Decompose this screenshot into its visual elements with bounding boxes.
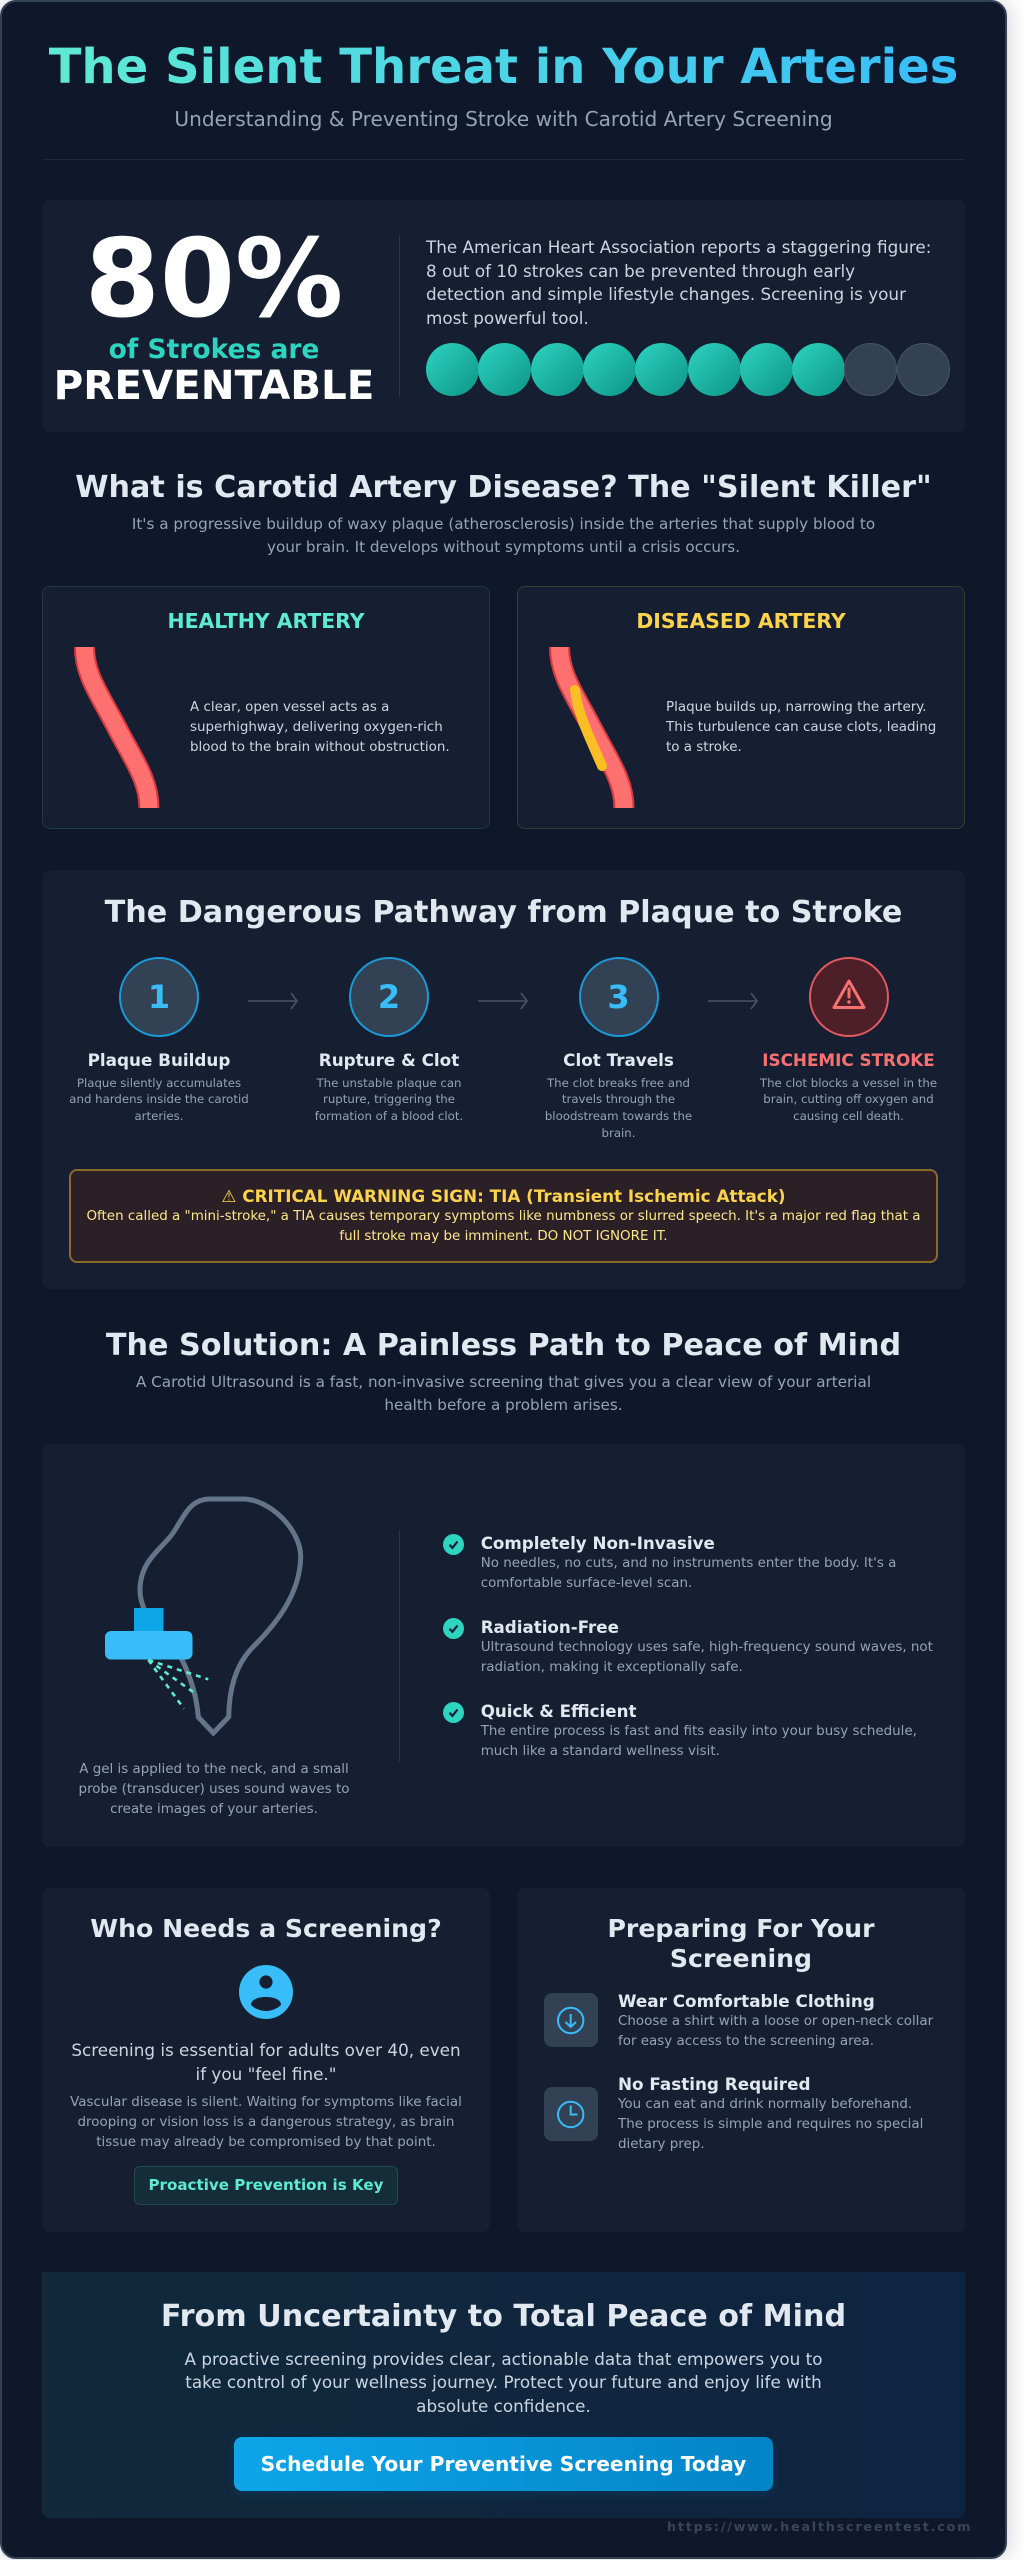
panel: diseased artery	[517, 586, 965, 829]
panel: pathway from plaque to stroke	[42, 870, 965, 1289]
benefit 3 title: Quick & Efficient	[481, 1701, 636, 1721]
warning text: Often called a "mini-stroke," a TIA causes temporary symptoms like numbness or slurred speech. It's a major red flag that a	[86, 1209, 921, 1224]
panel: ultrasound solution	[42, 1444, 965, 1847]
8 of 10 dots	[426, 343, 950, 396]
section intro	[132, 515, 875, 556]
illustration caption: A gel is applied to the neck, and a small	[79, 1762, 349, 1776]
diseased description: Plaque builds up, narrowing the artery.	[666, 700, 927, 715]
icon: check 3	[443, 1702, 464, 1723]
arrow	[248, 992, 298, 1010]
step 1 text: and hardens inside the carotid	[69, 1092, 249, 1106]
step 2 text: The unstable plaque can	[316, 1076, 462, 1090]
statistic explanation	[426, 237, 931, 328]
clothing text: Choose a shirt with a loose or open-neck collar	[618, 2014, 933, 2029]
step 2 number: 2	[378, 978, 400, 1016]
step 2 title: Rupture & Clot	[319, 1050, 459, 1070]
statistic explanation: detection and simple lifestyle changes. Screening is your	[426, 284, 906, 304]
benefit 3 text: much like a standard wellness visit.	[481, 1744, 720, 1759]
who lead text	[71, 2040, 461, 2084]
step 2 number	[349, 957, 429, 1037]
warning text	[86, 1209, 921, 1244]
preparing heading: Preparing For Your	[607, 1914, 875, 1943]
panel: call to action	[42, 2272, 965, 2518]
arrow	[478, 992, 528, 1010]
benefit 1 text: comfortable surface-level scan.	[481, 1576, 692, 1591]
stat label: of Strokes are	[109, 334, 319, 365]
fasting text: dietary prep.	[618, 2137, 705, 2152]
step 3 text	[545, 1076, 692, 1140]
healthy description	[190, 700, 450, 755]
benefit 2 text: Ultrasound technology uses safe, high-frequency sound waves, not	[481, 1640, 933, 1654]
benefit 2 text: radiation, making it exceptionally safe.	[481, 1660, 743, 1675]
illustration caption	[79, 1762, 349, 1817]
section intro: It's a progressive buildup of waxy plaque (atherosclerosis) inside the arteries that supply blood to	[132, 515, 875, 533]
icon: clock tile	[544, 2087, 598, 2141]
solution intro: A Carotid Ultrasound is a fast, non-invasive screening that gives you a clear view of your arterial	[136, 1372, 871, 1390]
big number: 80%	[85, 217, 343, 342]
diseased heading: DISEASED ARTERY	[636, 609, 846, 633]
fasting title: No Fasting Required	[618, 2074, 810, 2094]
icon: check 1	[443, 1534, 464, 1555]
healthy heading: HEALTHY ARTERY	[168, 609, 364, 633]
step 3 text: bloodstream towards the	[545, 1109, 692, 1123]
preventable label: PREVENTABLE	[54, 361, 374, 409]
benefit 1 text: No needles, no cuts, and no instruments enter the body. It's a	[481, 1556, 896, 1570]
diseased description: This turbulence can cause clots, leading	[666, 720, 936, 735]
step 3 number: 3	[607, 978, 630, 1016]
who heading: Who Needs a Screening?	[90, 1914, 442, 1943]
step 1 number	[119, 957, 199, 1037]
step 1 text: arteries.	[134, 1109, 184, 1123]
who lead text: Screening is essential for adults over 40, even	[71, 2040, 461, 2060]
fasting text: The process is simple and requires no special	[618, 2117, 923, 2132]
cta text: A proactive screening provides clear, actionable data that empowers you to	[185, 2348, 822, 2368]
warning title: ⚠ CRITICAL WARNING SIGN: TIA (Transient Ischemic Attack)	[221, 1186, 786, 1206]
icon: check 2	[443, 1618, 464, 1639]
healthy artery illustration	[74, 647, 160, 808]
who detail text: tissue may already be compromised by that point.	[96, 2135, 436, 2150]
step 2 text: rupture, triggering the	[323, 1092, 455, 1106]
cta text: take control of your wellness journey. Protect your future and enjoy life with	[185, 2372, 822, 2392]
warning text: full stroke may be imminent. DO NOT IGNORE IT.	[339, 1229, 668, 1244]
diseased description: to a stroke.	[666, 740, 742, 755]
step 3 title: Clot Travels	[563, 1050, 674, 1070]
solution intro: health before a problem arises.	[384, 1396, 623, 1414]
step 1 text	[69, 1076, 249, 1123]
subtitle: Understanding & Preventing Stroke with Carotid Artery Screening	[174, 107, 833, 131]
cta button: Schedule Your Preventive Screening Today	[261, 2452, 746, 2476]
panel: who needs a screening	[42, 1888, 490, 2232]
who detail text: Vascular disease is silent. Waiting for symptoms like facial	[70, 2094, 462, 2110]
benefit 1 text	[481, 1556, 896, 1591]
step 4 text: brain, cutting off oxygen and	[763, 1092, 934, 1106]
clothing title: Wear Comfortable Clothing	[618, 1991, 875, 2011]
badge: Proactive Prevention is Key	[148, 2176, 383, 2194]
step 3 text: The clot breaks free and	[547, 1076, 690, 1090]
preparing heading	[607, 1914, 875, 1973]
icon: person	[239, 1965, 293, 2019]
cta text	[184, 2348, 822, 2416]
benefit 2 text	[481, 1640, 933, 1675]
source url: https://www.healthscreentest.com	[667, 2520, 972, 2535]
clothing text: for easy access to the screening area.	[618, 2034, 874, 2049]
arrow	[708, 992, 758, 1010]
heading: what is carotid artery disease: What is Carotid Artery Disease? The "Silent Killer"	[75, 470, 932, 505]
callout: TIA warning	[69, 1169, 938, 1263]
section intro: your brain. It develops without symptoms until a crisis occurs.	[267, 538, 740, 556]
who detail text: drooping or vision loss is a dangerous strategy, as brain	[78, 2115, 454, 2130]
benefit 2 title: Radiation-Free	[481, 1617, 619, 1637]
step 3 number	[578, 957, 658, 1037]
step 2 text	[315, 1076, 463, 1123]
who lead text: if you "feel fine."	[196, 2064, 336, 2084]
solution intro	[136, 1372, 871, 1414]
illustration caption: create images of your arteries.	[110, 1802, 318, 1817]
panel: 80 percent statistic	[42, 200, 965, 432]
step 4 text: The clot blocks a vessel in the	[760, 1076, 937, 1090]
step 4 title: ISCHEMIC STROKE	[762, 1050, 935, 1070]
title: The Silent Threat in Your Arteries	[49, 39, 958, 95]
step 4 text: causing cell death.	[793, 1109, 904, 1123]
benefit 3 text: The entire process is fast and fits easily into your busy schedule,	[481, 1724, 917, 1738]
fasting text	[618, 2097, 923, 2152]
panel: healthy artery	[42, 586, 490, 829]
step 3 text: travels through the	[562, 1092, 675, 1106]
ultrasound illustration	[105, 1496, 304, 1736]
step 1 text: Plaque silently accumulates	[77, 1076, 241, 1090]
illustration caption: probe (transducer) uses sound waves to	[79, 1782, 349, 1797]
panel: preparing for your screening	[517, 1888, 965, 2232]
step 1 title: Plaque Buildup	[88, 1050, 230, 1070]
healthy description: A clear, open vessel acts as a	[190, 700, 389, 715]
step 2 text: formation of a blood clot.	[315, 1109, 463, 1123]
pathway heading: The Dangerous Pathway from Plaque to Stroke	[105, 895, 902, 930]
badge	[134, 2166, 398, 2205]
preparing heading: Screening	[670, 1944, 812, 1973]
fasting text: You can eat and drink normally beforehand.	[618, 2097, 912, 2112]
icon: stroke warning	[808, 957, 888, 1037]
healthy description: superhighway, delivering oxygen-rich	[190, 720, 443, 735]
statistic explanation: The American Heart Association reports a staggering figure:	[426, 237, 931, 257]
heading: the solution: The Solution: A Painless Path to Peace of Mind	[106, 1328, 901, 1363]
statistic explanation: 8 out of 10 strokes can be prevented through early	[426, 260, 855, 280]
healthy description: blood to the brain without obstruction.	[190, 740, 450, 755]
step 4 text	[760, 1076, 937, 1123]
icon: clothing tile	[544, 1993, 598, 2047]
step 1 number: 1	[148, 978, 170, 1016]
who detail text	[70, 2094, 462, 2150]
statistic explanation: most powerful tool.	[426, 308, 589, 328]
cta heading: From Uncertainty to Total Peace of Mind	[161, 2299, 846, 2334]
diseased artery illustration	[549, 647, 634, 808]
cta text: absolute confidence.	[416, 2396, 591, 2416]
diseased description	[666, 700, 936, 755]
benefit 1 title: Completely Non-Invasive	[481, 1533, 715, 1553]
clothing text	[618, 2014, 934, 2049]
cta button	[234, 2437, 773, 2491]
step 3 text: brain.	[602, 1126, 635, 1140]
benefit 3 text	[480, 1724, 917, 1759]
